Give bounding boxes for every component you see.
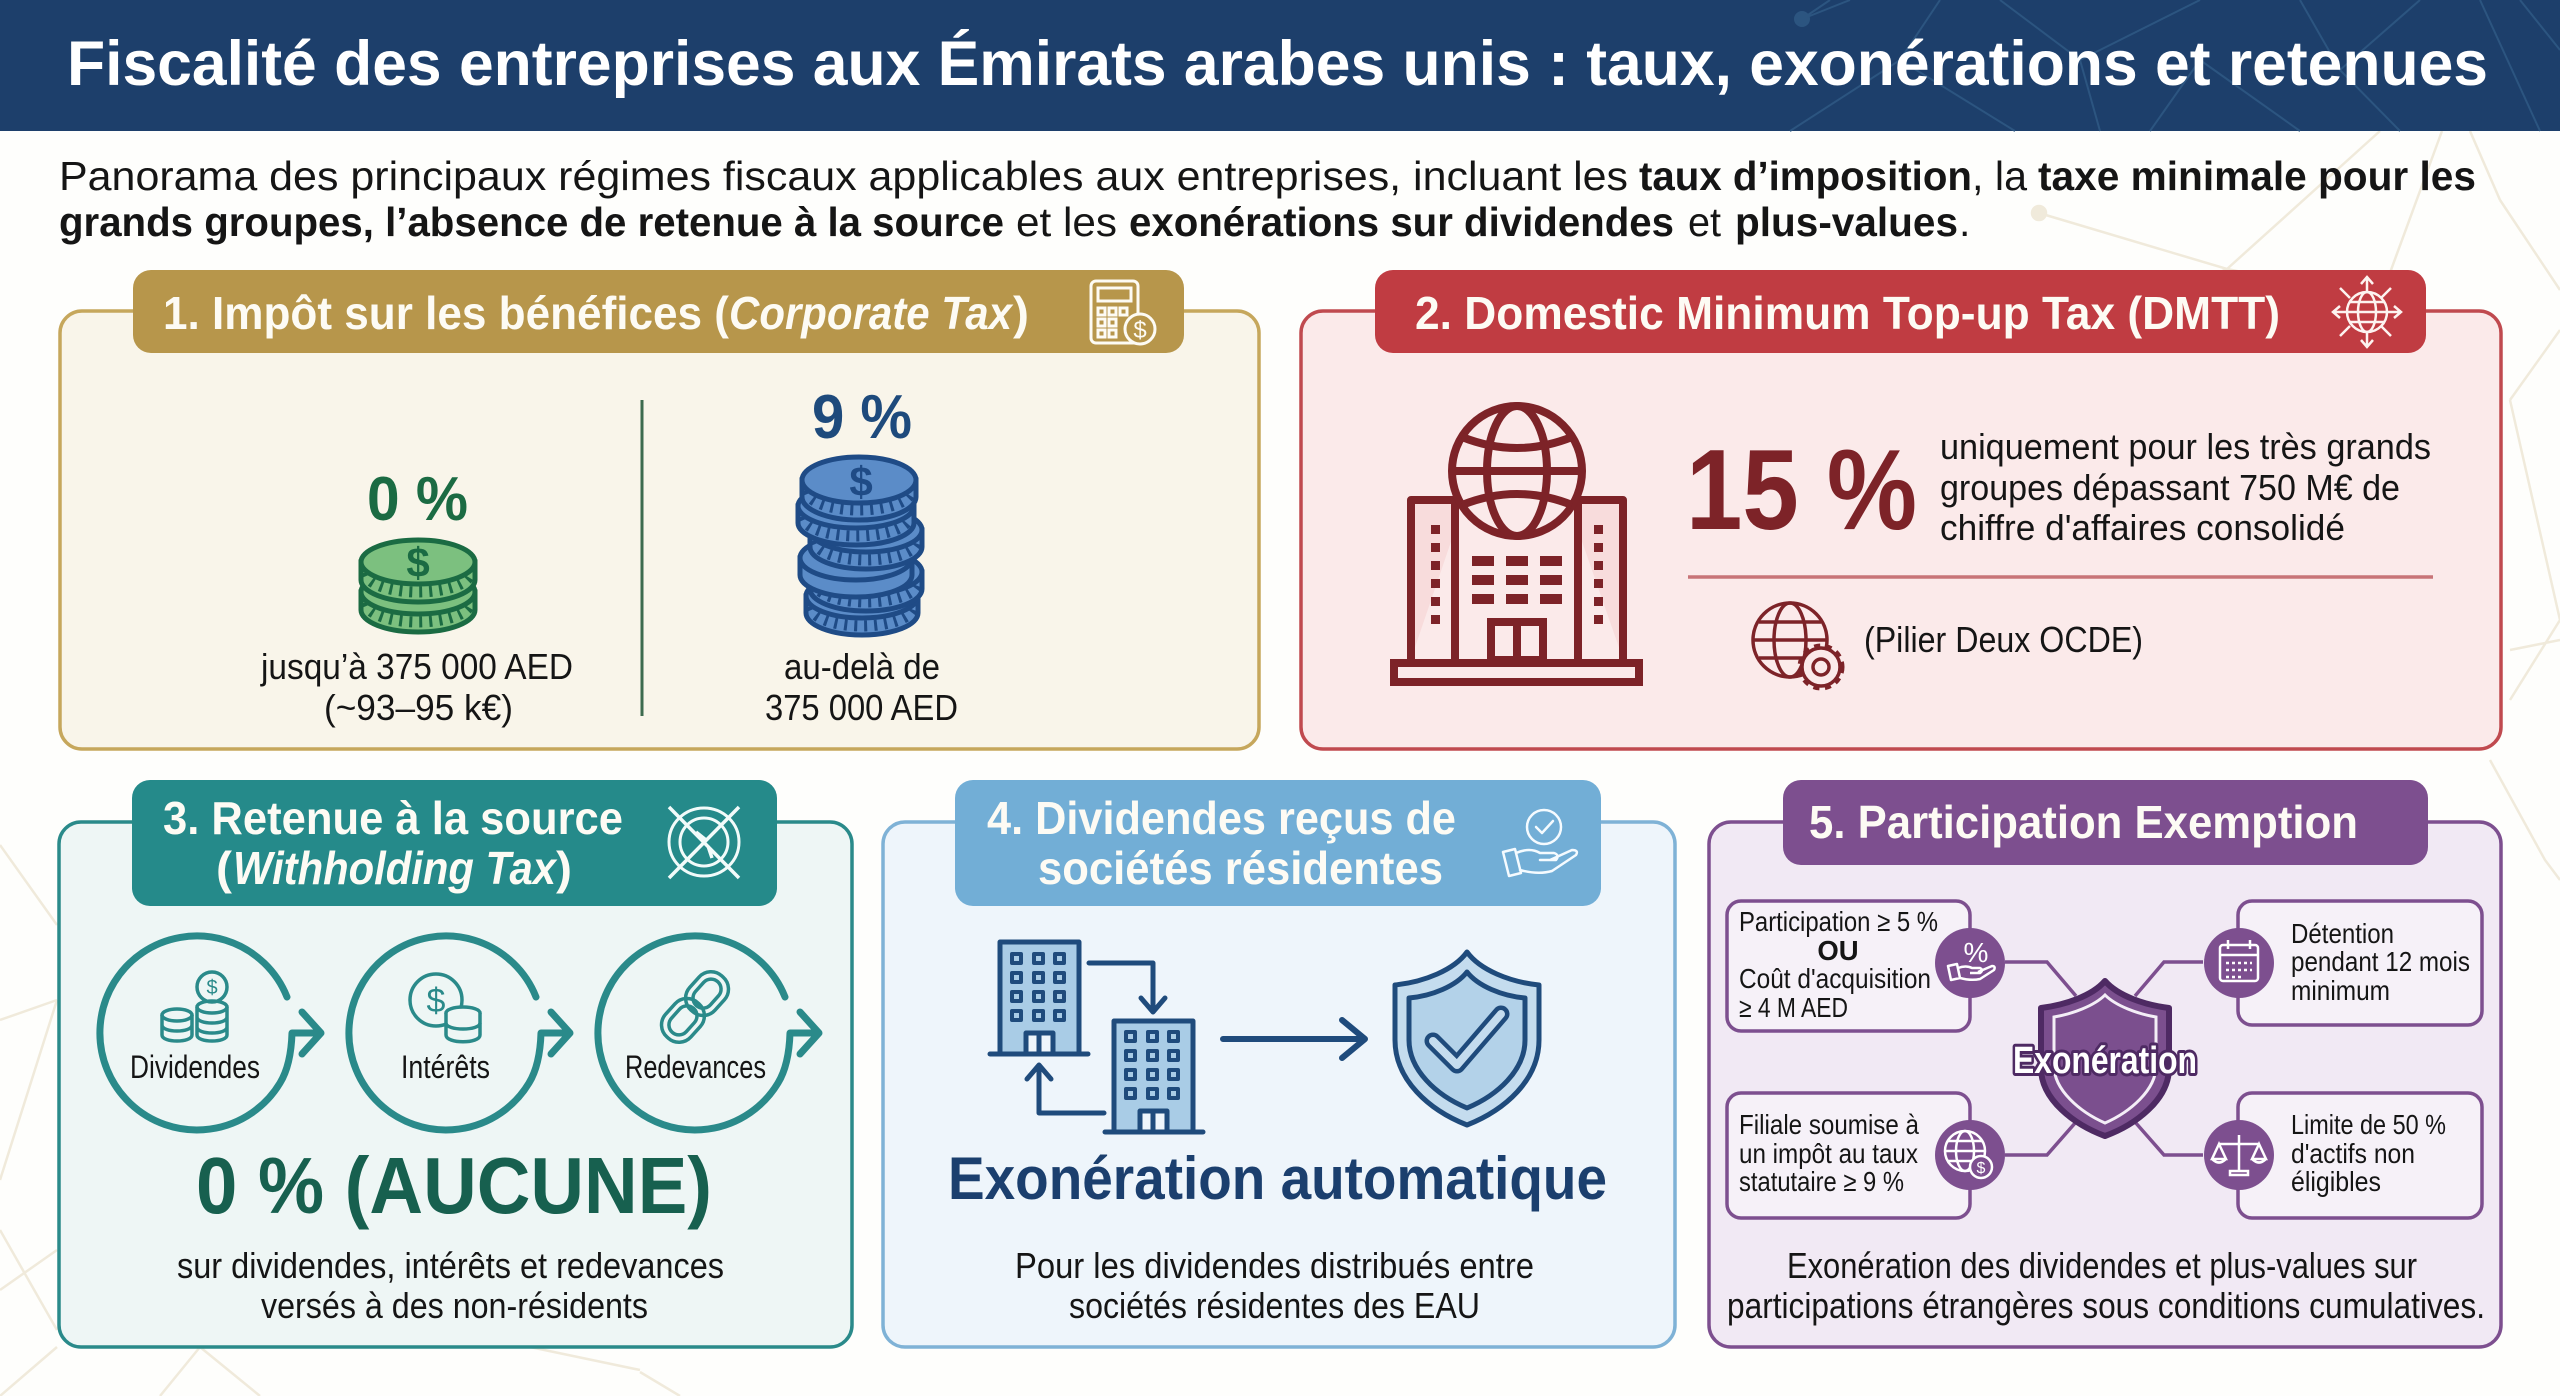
panel 5: participation exemption <box>1709 780 2501 1347</box>
text: beyond 375 000 AED: au-delà de <box>784 646 940 687</box>
withholding description: sur dividendes, intérêts et redevances <box>177 1245 724 1286</box>
icon: building with globe <box>1394 406 1639 682</box>
text: up to 375 000 AED <box>260 646 573 728</box>
icon: coin stacks: $ <box>206 977 218 999</box>
panel 4: resident dividends <box>883 780 1675 1347</box>
icon: crossed-out circle <box>669 807 739 878</box>
icon: globe with dollar <box>1935 1120 2005 1190</box>
header banner <box>0 0 2560 131</box>
divider <box>640 400 644 716</box>
panel 3: withholding tax <box>59 780 852 1347</box>
icon: coin with stack <box>410 974 480 1042</box>
condition box: holding period: Détention <box>2291 918 2394 949</box>
intro text: , la <box>1972 153 2027 199</box>
panel 5 heading <box>1783 780 2428 865</box>
flow: dividendes <box>100 936 321 1130</box>
text: beyond 375 000 AED: 375 000 AED <box>765 687 958 728</box>
rate 9 %: 9 % <box>812 383 912 452</box>
intro text: exonérations sur dividendes <box>1129 199 1674 245</box>
icon: globe with arrows <box>2333 277 2401 347</box>
shield label: Exonération <box>2013 1040 2197 1082</box>
panel 1: corporate tax <box>60 270 1259 749</box>
text: up to 375 000 AED: (~93–95 k€) <box>324 687 513 728</box>
icon: scales <box>2204 1120 2274 1190</box>
condition box: participation: Participation ≥ 5 % <box>1739 906 1938 937</box>
withholding description: versés à des non-résidents <box>261 1285 648 1326</box>
resident dividends description: sociétés résidentes des EAU <box>1069 1285 1480 1326</box>
condition box: assets limit <box>2238 1093 2482 1218</box>
text: beyond 375 000 AED <box>765 646 958 728</box>
panel 1 heading: ) <box>1013 287 1029 339</box>
icon: coin with stack: $ <box>427 982 446 1020</box>
panel 2 heading <box>1375 270 2426 353</box>
icon: green coins: $ <box>406 539 430 586</box>
automatic exemption: Exonération automatique <box>948 1145 1607 1212</box>
condition box: participation: ≥ 4 M AED <box>1739 992 1848 1023</box>
participation exemption description <box>1727 1245 2485 1326</box>
panel 2 heading: 2. Domestic Minimum Top-up Tax (DMTT) <box>1415 287 2280 339</box>
icon: hand with check <box>1503 810 1577 876</box>
intro text: Panorama des principaux régimes fiscaux applicables aux entreprises, incluant les <box>59 153 1628 199</box>
icon: percent hand <box>1935 928 2005 998</box>
DMTT description: uniquement pour les très grands <box>1940 426 2431 467</box>
flow: interets <box>349 936 570 1130</box>
icon: calendar <box>2204 928 2274 998</box>
intro text: plus-values <box>1735 199 1958 245</box>
intro text: taux d’imposition <box>1639 153 1972 199</box>
icon: two buildings with flows <box>990 942 1203 1132</box>
condition box: holding period <box>2238 901 2482 1025</box>
rate 0 % none: 0 % (AUCUNE) <box>196 1141 712 1230</box>
DMTT description <box>1940 426 2431 548</box>
participation exemption description: Exonération des dividendes et plus-values sur <box>1787 1245 2417 1286</box>
condition box: assets limit: Limite de 50 % <box>2291 1109 2446 1140</box>
panel 3 heading: Withholding Tax <box>233 842 558 894</box>
condition box: assets limit: éligibles <box>2291 1166 2381 1197</box>
icon: central shield <box>2013 981 2197 1136</box>
icon: chain link <box>655 965 735 1049</box>
panel 4 heading <box>955 780 1601 906</box>
condition box: participation <box>1727 901 1970 1031</box>
icon: blue coins: $ <box>849 458 873 505</box>
panel 5 heading: 5. Participation Exemption <box>1809 796 2358 848</box>
DMTT description: groupes dépassant 750 M€ de <box>1940 467 2400 508</box>
condition box: holding period: minimum <box>2291 975 2390 1006</box>
icon: shield with check <box>1395 952 1539 1125</box>
rate 0 %: 0 % <box>367 465 468 534</box>
panel 3 heading: ( <box>216 842 233 894</box>
withholding description <box>177 1245 724 1326</box>
panel 3 heading: ) <box>556 842 572 894</box>
icon: globe with dollar: $ <box>1977 1160 1986 1177</box>
OECD pillar two: (Pilier Deux OCDE) <box>1864 619 2143 660</box>
DMTT description: chiffre d'affaires consolidé <box>1940 507 2345 548</box>
intro text <box>59 153 2476 245</box>
title: Fiscalité des entreprises aux Émirats arabes unis : taux, exonérations et retenues <box>67 29 2488 99</box>
icon: calculator <box>1091 281 1155 344</box>
condition box: subsidiary tax: Filiale soumise à <box>1739 1109 1920 1140</box>
condition box: subsidiary tax: statutaire ≥ 9 % <box>1739 1166 1904 1197</box>
resident dividends description <box>1015 1245 1534 1326</box>
resident dividends description: Pour les dividendes distribués entre <box>1015 1245 1534 1286</box>
panel 4 heading: 4. Dividendes reçus de <box>987 792 1456 844</box>
icon: blue coins <box>798 457 922 635</box>
icon: coin stacks <box>162 972 227 1041</box>
rate 15 %: 15 % <box>1686 427 1917 554</box>
intro text: et les <box>1016 199 1117 245</box>
text: up to 375 000 AED: jusqu’à 375 000 AED <box>260 646 573 687</box>
icon: percent hand: % <box>1964 937 1988 968</box>
flow: interets: Intérêts <box>401 1049 490 1085</box>
panel 1 heading: Corporate Tax <box>729 287 1014 339</box>
arrow <box>1223 1020 1365 1058</box>
panel 3 heading: 3. Retenue à la source <box>163 792 623 844</box>
flow: redevances <box>598 936 819 1130</box>
panel 1 heading <box>133 270 1184 353</box>
condition box: participation: OU <box>1817 935 1859 966</box>
panel 4 heading: sociétés résidentes <box>1038 842 1443 894</box>
panel 3 heading <box>132 780 777 906</box>
condition box: assets limit: d'actifs non <box>2291 1138 2415 1169</box>
intro text: grands groupes, l’absence de retenue à la source <box>59 199 1004 245</box>
flow: redevances: Redevances <box>625 1049 766 1085</box>
intro text: et <box>1688 199 1722 245</box>
panel 1 heading: 1. Impôt sur les bénéfices ( <box>163 287 730 339</box>
condition box: subsidiary tax <box>1727 1093 1970 1218</box>
connectors <box>2005 962 2203 1155</box>
icon: green coins <box>361 539 475 632</box>
icon: calculator: $ <box>1133 317 1147 344</box>
condition box: subsidiary tax: un impôt au taux <box>1739 1138 1918 1169</box>
intro text: . <box>1959 199 1970 245</box>
intro text: taxe minimale pour les <box>2038 153 2476 199</box>
icon: globe with gear <box>1753 603 1842 688</box>
condition box: participation: Coût d'acquisition <box>1739 963 1931 994</box>
panel 2: DMTT <box>1301 270 2501 749</box>
condition box: holding period: pendant 12 mois <box>2291 946 2470 977</box>
flow: dividendes: Dividendes <box>130 1049 260 1085</box>
